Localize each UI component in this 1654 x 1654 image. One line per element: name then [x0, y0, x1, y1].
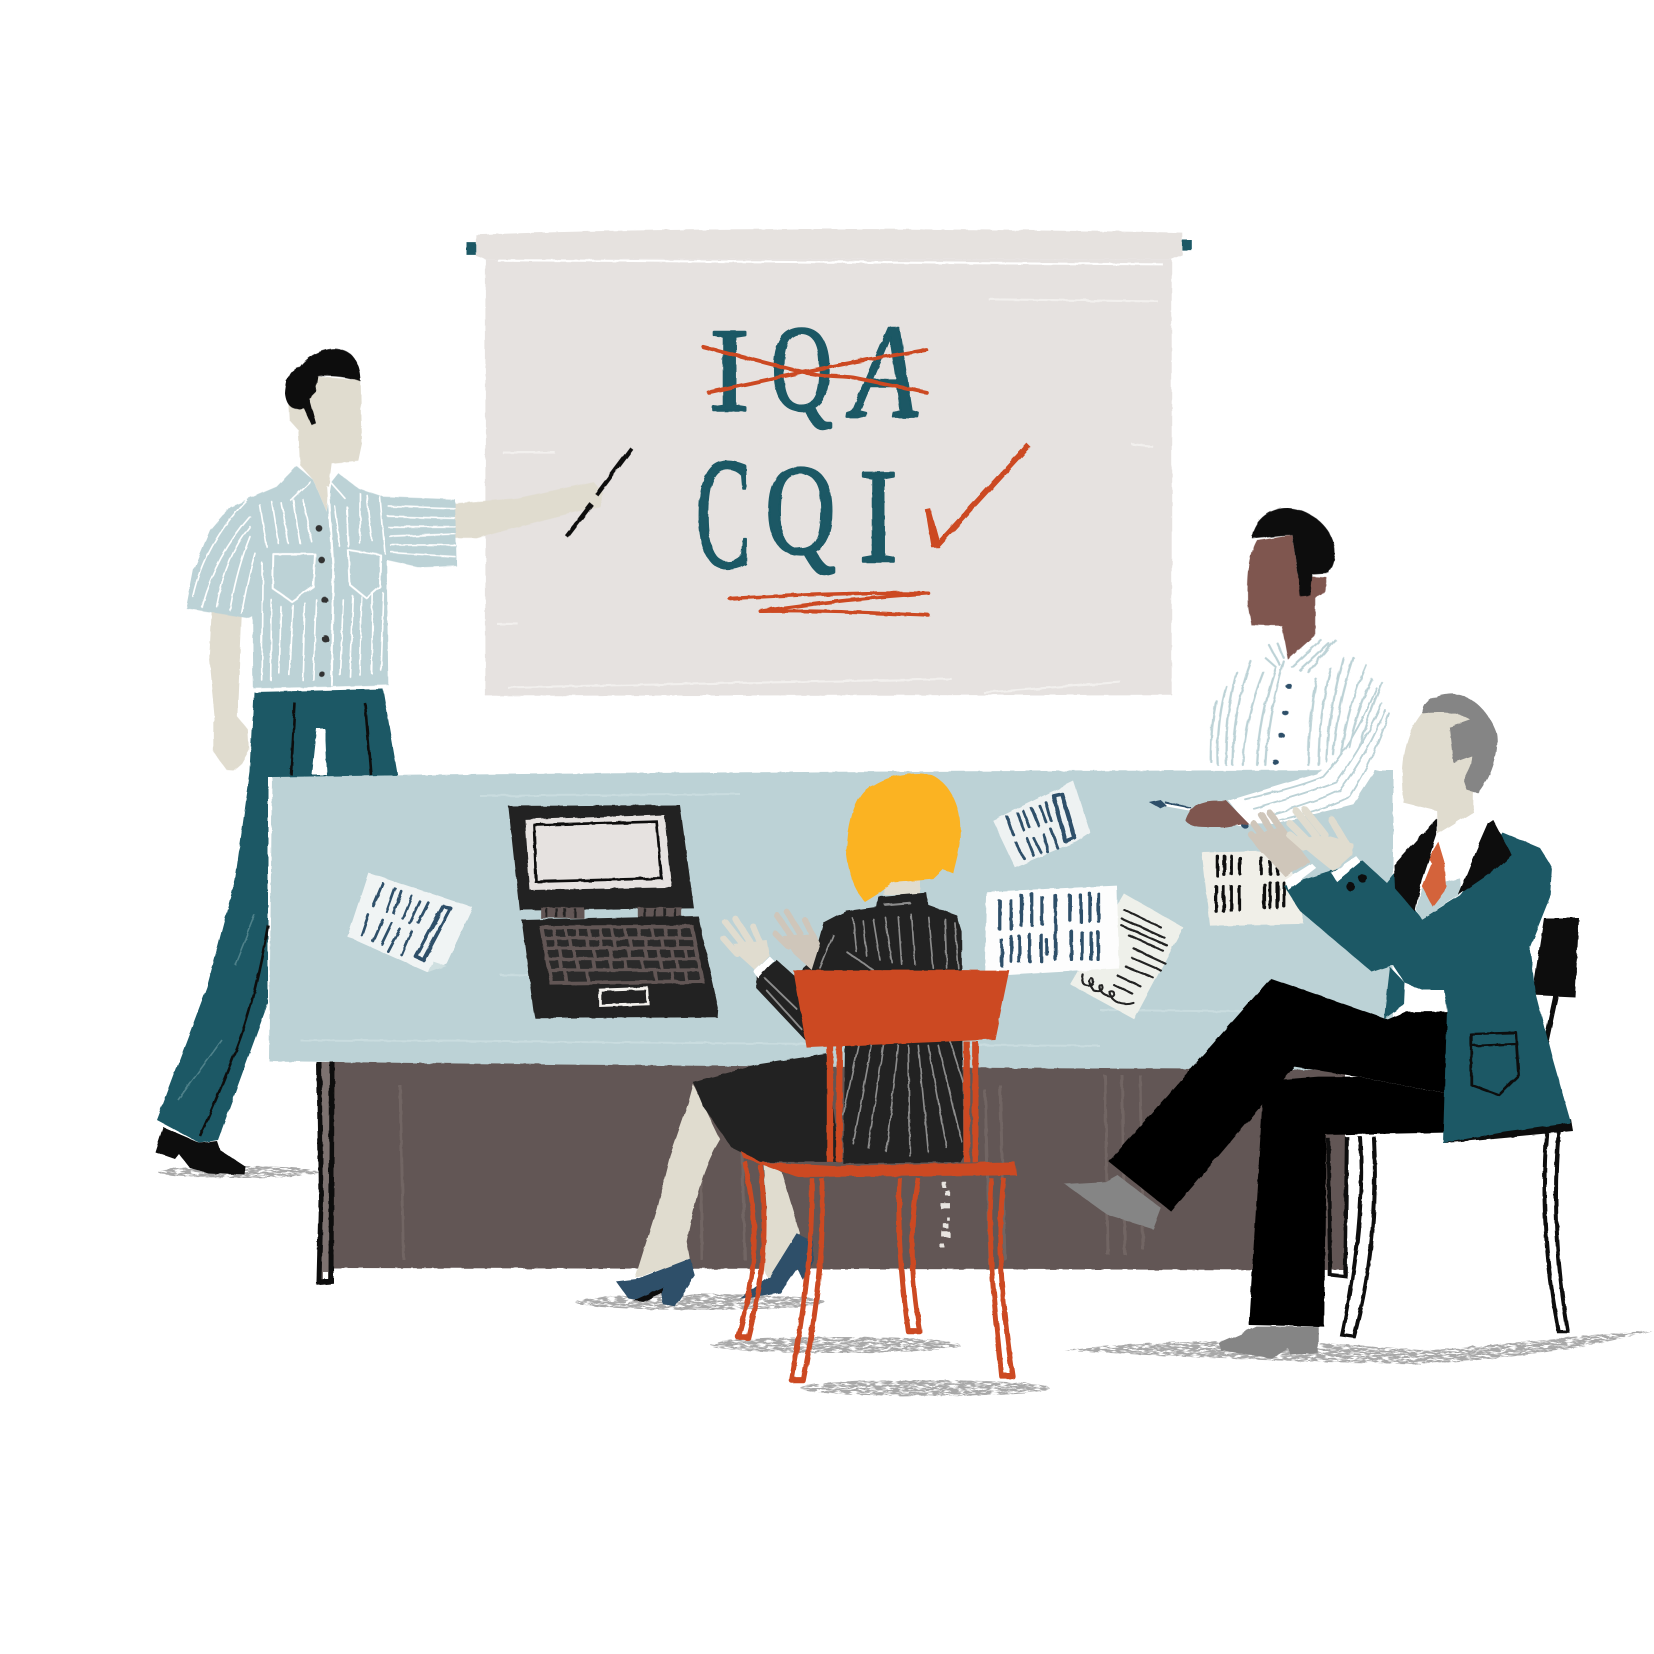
woman skirt	[693, 1054, 840, 1162]
chair posts	[830, 1042, 975, 1162]
presenter hanging arm	[209, 612, 249, 771]
black lapels	[1394, 818, 1512, 912]
laptop lid	[508, 805, 694, 910]
check mark	[925, 443, 1031, 548]
keyboard	[542, 927, 703, 983]
forearm stripes	[1245, 688, 1389, 820]
heading: IQA crossed out: I	[710, 304, 749, 436]
paper: white table sheet	[985, 886, 1119, 976]
projection screen	[466, 229, 1192, 696]
presenter trousers	[157, 689, 398, 1143]
desk right leg	[1328, 1137, 1347, 1277]
desk streaks	[400, 1075, 1143, 1265]
chair back	[1532, 918, 1579, 997]
red cross strokes	[703, 347, 926, 392]
table top	[269, 770, 1393, 1070]
striped white shirt body	[1211, 640, 1382, 765]
pointer stick	[567, 448, 632, 537]
seated man standing leg	[1249, 1077, 1445, 1327]
woman hair	[846, 773, 960, 902]
white shirt front	[1415, 812, 1492, 918]
chair legs	[738, 1162, 1013, 1380]
roller highlight	[497, 260, 1163, 264]
heading: CQI: C	[696, 426, 751, 602]
heading: CQI: Q	[766, 438, 836, 581]
woman seated on red chair	[616, 773, 1017, 1380]
jacket cuffs	[1285, 857, 1361, 890]
pencil	[1149, 800, 1248, 828]
standing man hand	[1185, 801, 1249, 827]
woman back hand	[775, 912, 820, 970]
standing man forearm	[1228, 713, 1390, 824]
woman front shoe	[616, 1259, 695, 1307]
presenter shirt	[186, 466, 457, 688]
table	[269, 770, 1393, 1283]
shirt buttons	[1272, 684, 1292, 765]
standing man hair	[1252, 508, 1335, 596]
red underline	[730, 593, 928, 615]
laptop hinges	[541, 907, 682, 918]
trackpad	[600, 988, 648, 1006]
jacket pocket	[1471, 1033, 1519, 1095]
seated man raised leg	[1109, 978, 1447, 1212]
chair backrest	[793, 970, 1009, 1048]
presenter neck and face	[288, 377, 362, 512]
table streaks	[300, 794, 1300, 1046]
woman front hand	[723, 918, 769, 970]
raised shoe	[1065, 1175, 1161, 1229]
screen streaks	[497, 299, 1158, 693]
laptop screen	[525, 815, 672, 890]
chair back stem	[1546, 995, 1556, 1042]
seated man's chair	[1328, 918, 1579, 1337]
chair front-left leg	[1342, 1137, 1375, 1337]
lower shoe	[1219, 1327, 1318, 1358]
illustration	[155, 229, 1652, 1396]
paper: signed letter	[1071, 894, 1183, 1019]
shirt buttons	[316, 525, 329, 677]
seat edge	[1445, 1119, 1573, 1143]
woman cuff	[753, 956, 774, 978]
heading: IQA crossed out	[710, 298, 919, 446]
chair right leg	[1544, 1132, 1568, 1332]
laptop	[508, 805, 718, 1018]
red chair	[738, 970, 1017, 1380]
presenter pointing arm	[455, 482, 603, 538]
screen sheet	[485, 259, 1172, 696]
screen roller caps	[466, 240, 1192, 255]
screen roller	[476, 229, 1182, 259]
woman front leg	[635, 1084, 720, 1278]
floor shadows	[158, 1166, 1652, 1396]
laptop base	[522, 916, 718, 1018]
paper: tilted sheet with oval	[993, 781, 1090, 868]
presenter figure	[155, 349, 632, 1175]
woman back shoe	[740, 1233, 813, 1299]
desk front panel	[333, 1060, 1345, 1270]
seated man face and neck	[1402, 712, 1473, 834]
white specks on desk	[940, 1182, 950, 1248]
heading: IQA crossed out: Q	[771, 300, 832, 436]
jacket	[1284, 832, 1571, 1143]
orange tie	[1422, 842, 1447, 907]
woman striped jacket	[757, 893, 963, 1164]
shirt lower panel	[1416, 878, 1462, 919]
front clapping hand	[1290, 810, 1353, 872]
cuff buttons	[1346, 874, 1367, 891]
woman back leg	[760, 1162, 800, 1282]
standing man behind table	[1211, 508, 1382, 765]
presenter shoe	[155, 1127, 246, 1175]
woman neck	[883, 878, 920, 895]
back clapping hand	[1250, 813, 1310, 877]
paper left	[347, 873, 473, 973]
presenter hair	[285, 349, 361, 425]
standing man face and neck	[1248, 535, 1327, 660]
heading: CQI: I	[859, 442, 898, 591]
paper: cream sheet under hands	[1202, 851, 1304, 926]
heading: CQI	[696, 426, 898, 602]
seated man	[1065, 693, 1573, 1358]
seated man grey hair	[1423, 693, 1497, 793]
desk left leg	[319, 1062, 332, 1283]
heading: IQA crossed out: A	[846, 298, 919, 446]
chair seat	[741, 1151, 1017, 1177]
